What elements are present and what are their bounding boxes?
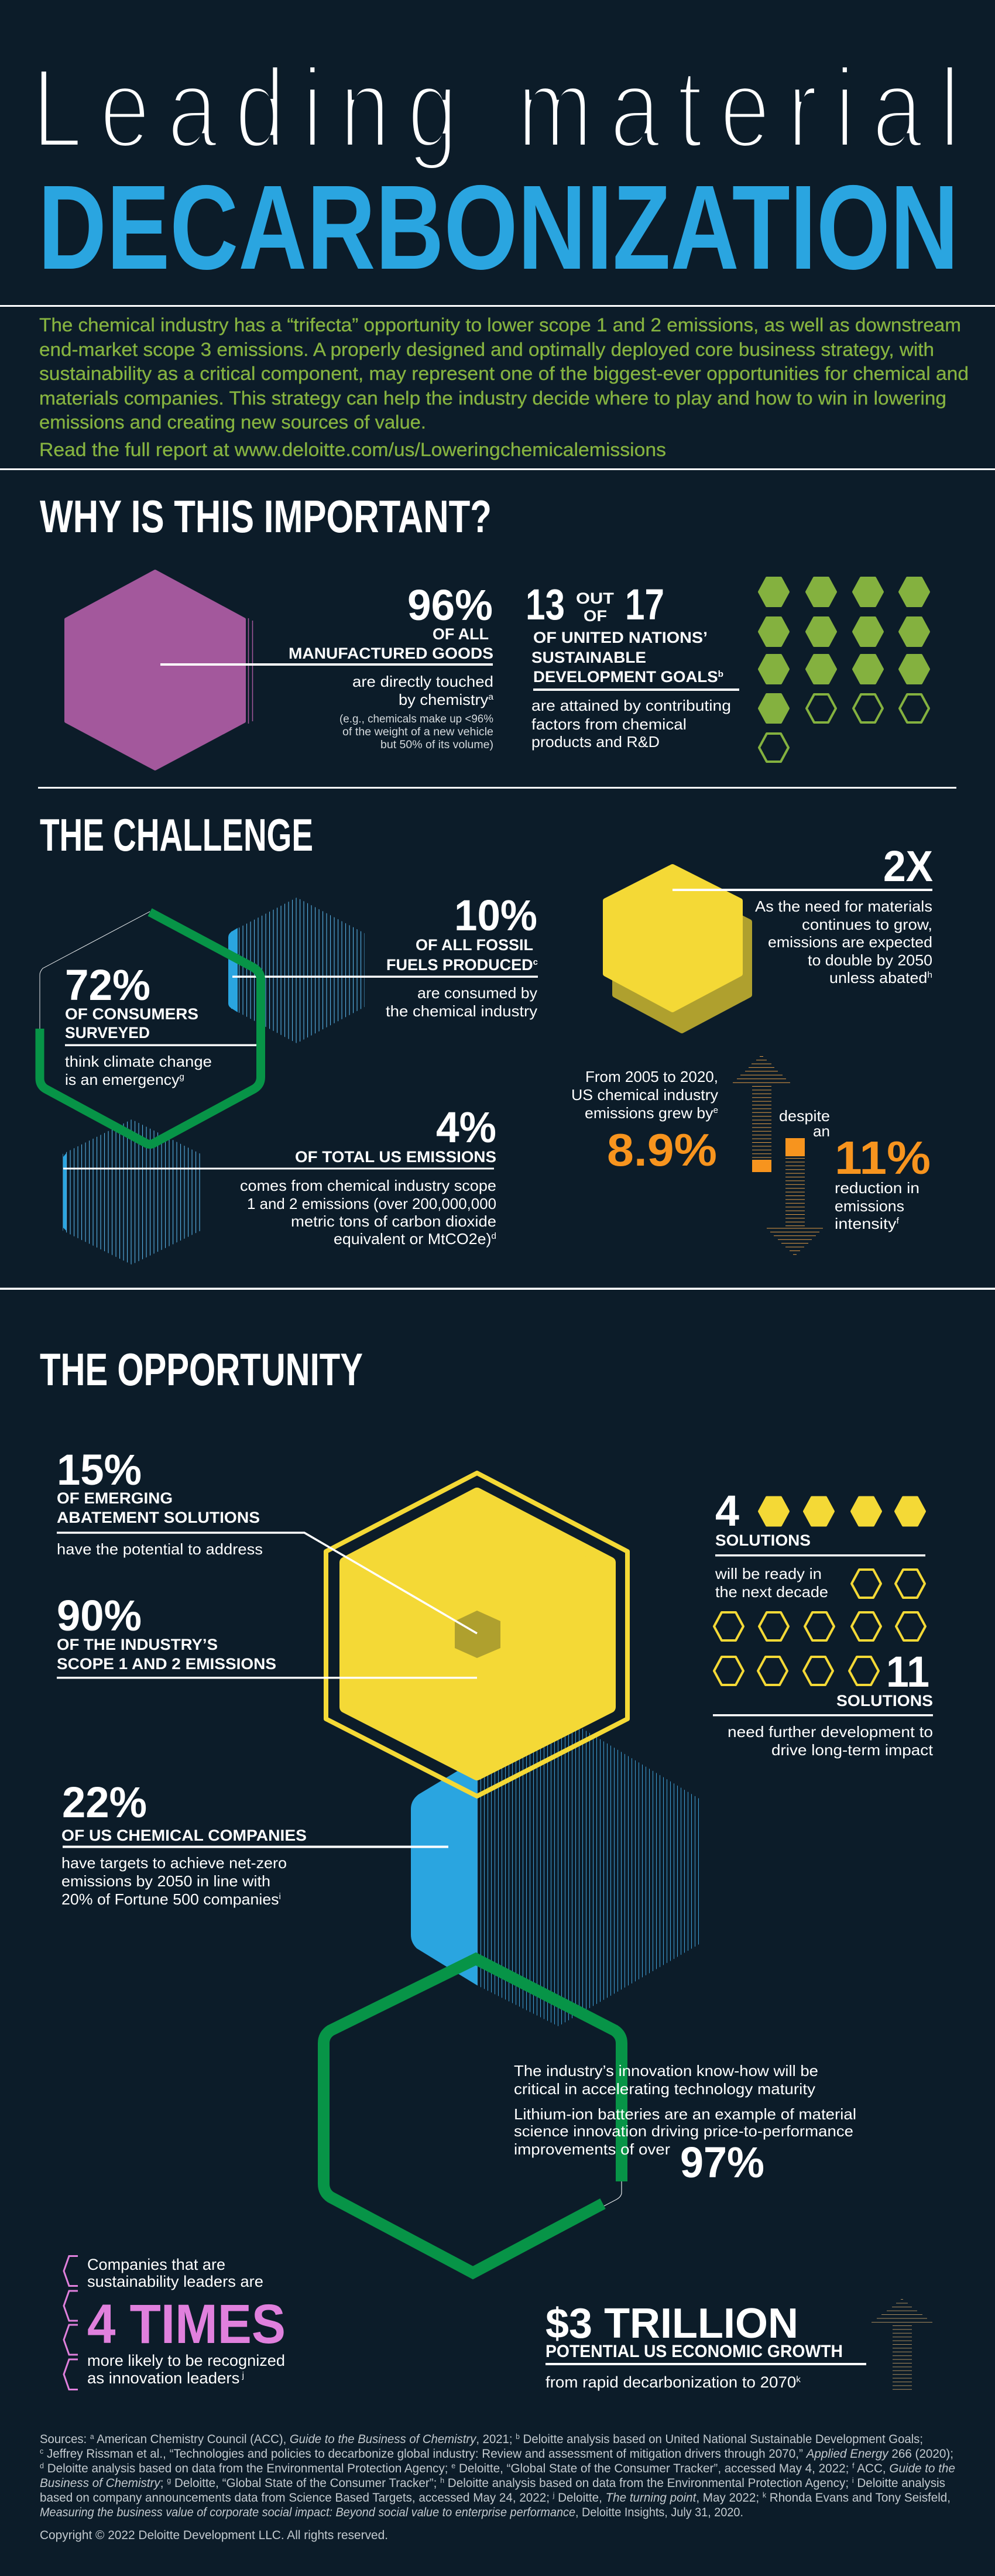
stat: 11% reduction: emissions	[835, 1197, 904, 1215]
stat: 90%: 90%	[57, 1591, 142, 1640]
stat: 4%: 1 and 2 emissions (over 200,000,000	[247, 1195, 496, 1212]
stat: 72%	[65, 961, 256, 1088]
sources: American Chemistry Council (ACC),	[94, 2432, 290, 2446]
stat: 2X: unless abated	[829, 969, 924, 986]
intro paragraph: materials companies. This strategy can help the industry decide where to play and how to win in lowering	[39, 388, 946, 409]
stat: 11 solutions: 11	[886, 1647, 929, 1696]
stat: 4%: d	[491, 1231, 496, 1241]
stat: 4%: equivalent or MtCO2e)	[334, 1230, 487, 1248]
stat: 13 out of 17: products and R&D	[531, 733, 660, 751]
sources: i	[852, 2476, 854, 2485]
stat: 11 solutions: need further development to	[728, 1723, 933, 1741]
stat: 15%: OF EMERGING	[57, 1489, 173, 1507]
sources: Business of Chemistry;	[40, 2476, 165, 2490]
stat: 15%	[57, 1445, 477, 1633]
stat: 96%: are directly touched	[352, 673, 493, 690]
stat: 13 out of 17: are attained by contributing	[531, 697, 731, 714]
sources: Rhonda Evans and Tony Seisfeld,	[766, 2491, 951, 2505]
intro paragraph: The chemical industry has a “trifecta” opportunity to lower scope 1 and 2 emissions, as well as downstream	[39, 314, 961, 335]
stat: 15%: ABATEMENT SOLUTIONS	[57, 1509, 260, 1526]
sources: h	[440, 2476, 444, 2485]
stat: 90%	[57, 1591, 477, 1679]
stat: 22%	[61, 1778, 448, 1908]
stat: 10%: the chemical industry	[386, 1002, 537, 1020]
icon: striped hexagon 10%	[228, 898, 365, 1043]
stat: 96%: a	[488, 692, 494, 702]
stat: 72%: OF CONSUMERS	[65, 1005, 198, 1023]
sources: Deloitte analysis	[854, 2476, 945, 2490]
stat: 13 out of 17: b	[718, 669, 723, 679]
stat: 11% reduction: 11%	[835, 1132, 931, 1184]
stat: 72%: is an emergency	[65, 1071, 177, 1088]
stat: 4 solutions	[715, 1486, 925, 1601]
text: innovation and 97%: critical in accelerating technology maturity	[514, 2080, 815, 2098]
sources: k	[763, 2491, 767, 2499]
stat: $3 trillion: k	[796, 2375, 801, 2385]
stat: 8.9% growth	[571, 1068, 718, 1176]
stat: 11% reduction: intensity	[835, 1215, 890, 1232]
stat: 96%: by chemistry	[399, 691, 484, 708]
sources: d	[40, 2461, 44, 2470]
stat: 11 solutions: SOLUTIONS	[836, 1692, 933, 1710]
stat: 4%: OF TOTAL US EMISSIONS	[295, 1148, 496, 1166]
icon: striped hexagon 4%	[63, 1119, 201, 1265]
sources: Deloitte, “Global State of the Consumer Tracker”, accessed May 4, 2022;	[455, 2461, 852, 2475]
sources: f	[852, 2461, 855, 2470]
icon: pink hexagon brackets	[64, 2256, 78, 2390]
sources: Deloitte,	[554, 2491, 606, 2505]
title line: Leading material: Leading material	[32, 46, 960, 172]
stat: 13 out of 17: OF UNITED NATIONS’	[533, 629, 708, 646]
stat: 2X: 2X	[883, 842, 933, 890]
arrow: up	[733, 1056, 790, 1172]
stat: $3 trillion: $3 TRILLION	[545, 2300, 798, 2347]
icon: large green open hexagon	[324, 1959, 622, 2273]
stat: 10%: are consumed by	[417, 984, 537, 1002]
stat: 4%: metric tons of carbon dioxide	[291, 1212, 496, 1230]
stat: 10%: OF ALL FOSSIL	[416, 936, 533, 954]
stat: 72%: SURVEYED	[65, 1024, 150, 1042]
stat: 72%: 72%	[65, 961, 150, 1009]
stat: 2X: h	[927, 970, 932, 980]
stat: 22%: i	[279, 1892, 281, 1902]
title	[32, 46, 960, 294]
stat: 10%: c	[533, 957, 538, 967]
stat: 22%: OF US CHEMICAL COMPANIES	[61, 1827, 307, 1844]
stat: 4 times: more likely to be recognized	[87, 2352, 285, 2369]
stat: 13 out of 17: 17	[625, 580, 664, 629]
sources: a	[90, 2432, 94, 2441]
stat: 72%: think climate change	[65, 1053, 212, 1070]
sources: c	[40, 2447, 44, 2455]
stat: 2X: emissions are expected	[768, 933, 932, 951]
stat: 96%: 96%	[407, 581, 493, 629]
heading: why is this important: WHY IS THIS IMPORTANT?	[40, 491, 492, 542]
sources: Deloitte, “Global State of the Consumer Tracker”;	[171, 2476, 440, 2490]
stat: 4%: comes from chemical industry scope	[240, 1177, 496, 1194]
stat: 13 out of 17: 13	[526, 580, 565, 629]
stat: 4 solutions: 4	[715, 1486, 739, 1535]
stat: 2X: to double by 2050	[808, 951, 932, 969]
sources: Deloitte analysis based on United National Sustainable Development Goals;	[520, 2432, 923, 2446]
sources: ACC,	[855, 2461, 889, 2475]
stat: 72%: g	[179, 1072, 184, 1082]
stat: 13 out of 17: factors from chemical	[531, 715, 687, 733]
stat: 11 solutions: drive long-term impact	[771, 1741, 934, 1759]
stat: 22%: have targets to achieve net-zero	[61, 1854, 287, 1872]
sources: based on company announcements data from Science Based Targets, accessed May 24, 2022;	[40, 2491, 571, 2505]
stat: 10%: FUELS PRODUCED	[386, 956, 533, 974]
stat: 2X: continues to grow,	[802, 916, 932, 933]
sources: Guide to the Business of Chemistry, 2021;	[290, 2432, 514, 2446]
stat: 11% reduction	[779, 1107, 931, 1232]
stat: $3 trillion: POTENTIAL US ECONOMIC GROWTH	[545, 2342, 843, 2361]
sources: Applied Energy 266 (2020);	[807, 2447, 956, 2461]
sources: b	[516, 2432, 520, 2441]
intro paragraph: emissions and creating new sources of value.	[39, 412, 426, 433]
stat: 13 out of 17	[526, 580, 739, 751]
arrow: down	[767, 1138, 823, 1255]
stat: 96%	[160, 581, 494, 751]
sources: j	[553, 2491, 555, 2499]
stat: 22%: 20% of Fortune 500 companies	[61, 1890, 273, 1908]
text: innovation and 97%: improvements of over	[514, 2140, 670, 2158]
stat: 8.9% growth: 8.9%	[607, 1124, 717, 1176]
heading: the opportunity: THE OPPORTUNITY	[40, 1344, 363, 1395]
stat: 8.9% growth: emissions grew by	[585, 1104, 710, 1122]
stat: 15%: 15%	[57, 1445, 142, 1494]
stat: 11% reduction: reduction in	[835, 1179, 919, 1197]
stat: 13 out of 17: DEVELOPMENT GOALS	[533, 668, 714, 686]
stat: 8.9% growth: e	[713, 1105, 718, 1115]
stat: 10%: 10%	[454, 891, 537, 940]
text: innovation and 97%: Lithium-ion batteries are an example of material	[514, 2105, 856, 2123]
text: innovation and 97%: 97%	[680, 2138, 764, 2187]
stat: 4 times: 4 TIMES	[87, 2293, 286, 2355]
icon: large yellow hexagon	[326, 1473, 627, 1796]
stat: 11 solutions	[713, 1647, 934, 1759]
stat: 13 out of 17: OUT	[576, 590, 615, 607]
stat: $3 trillion	[545, 2300, 866, 2391]
intro paragraph: sustainability as a critical component, may represent one of the biggest-ever opportunities for chemical and	[39, 363, 969, 384]
stat: 96%: OF ALL	[433, 625, 489, 643]
sources: Jeffrey Rissman et al., “Technologies and policies to decarbonize global industry: Review and assessment of mitigation drivers through 2070,”	[43, 2447, 807, 2461]
stat: 4%	[63, 1103, 496, 1248]
stat: 96%: of the weight of a new vehicle	[342, 726, 493, 738]
intro paragraph: end-market scope 3 emissions. A properly designed and optimally deployed core business strategy, with	[39, 339, 934, 360]
stat: 4 times: j	[239, 2371, 244, 2380]
stat: $3 trillion: from rapid decarbonization to 2070	[545, 2373, 790, 2391]
stat: 8.9% growth: US chemical industry	[571, 1086, 718, 1104]
sources: g	[167, 2476, 171, 2485]
sources: Measuring the business value of corporate social impact: Beyond social value to enterprise performance, Deloitte Insights, July 31, 2020.	[40, 2505, 743, 2519]
stat: 96%: but 50% of its volume)	[380, 739, 493, 751]
stat: 4%: 4%	[436, 1103, 496, 1152]
stat: 22%: 22%	[62, 1778, 147, 1827]
stat: 96%: (e.g., chemicals make up <96%	[339, 713, 493, 725]
sources	[40, 2432, 955, 2519]
stat: 4 times: sustainability leaders are	[87, 2273, 263, 2290]
sources: Sources:	[40, 2432, 90, 2446]
text: innovation and 97%: science innovation driving price-to-performance	[514, 2122, 853, 2140]
sources: The turning point, May 2022;	[606, 2491, 762, 2505]
stat: 10%	[232, 891, 538, 1020]
intro paragraph	[39, 314, 969, 460]
stat: 90%: SCOPE 1 AND 2 EMISSIONS	[57, 1655, 276, 1673]
stat: 90%: OF THE INDUSTRY’S	[57, 1636, 218, 1653]
sources: Deloitte analysis based on data from the Environmental Protection Agency;	[44, 2461, 451, 2475]
stat: 11% reduction: an	[813, 1122, 830, 1140]
stat: 4 solutions: will be ready in	[715, 1565, 822, 1582]
icon grid: solution hexagons	[714, 1498, 925, 1685]
icon: yellow hexagons 2X	[606, 867, 749, 1030]
icon: green open hexagon 72%	[40, 912, 261, 1144]
sources: Guide to the	[889, 2461, 955, 2475]
stat: 96%: MANUFACTURED GOODS	[289, 645, 493, 662]
copyright: Copyright © 2022 Deloitte Development LLC. All rights reserved.	[40, 2528, 388, 2542]
stat: 22%: emissions by 2050 in line with	[61, 1872, 270, 1890]
text: innovation and 97%: The industry’s innovation know-how will be	[514, 2062, 818, 2080]
stat: 4 times	[87, 2256, 286, 2387]
heading: the challenge: THE CHALLENGE	[40, 809, 313, 861]
stat: 2X: As the need for materials	[755, 898, 932, 915]
stat: 8.9% growth: From 2005 to 2020,	[585, 1068, 718, 1085]
stat: 11% reduction: f	[896, 1216, 900, 1226]
stat: 4 solutions: SOLUTIONS	[715, 1532, 811, 1549]
text: innovation and 97%	[514, 2062, 856, 2187]
stat: 4 times: as innovation leaders	[87, 2369, 236, 2387]
icon grid: 13 of 17 hexagons	[759, 578, 929, 762]
stat: 15%: have the potential to address	[57, 1540, 263, 1558]
stat: 4 times: Companies that are	[87, 2256, 225, 2273]
sources: e	[451, 2461, 455, 2470]
arrow: economic growth	[872, 2300, 932, 2389]
stat: 2X	[673, 842, 933, 986]
stat: 13 out of 17: OF	[584, 607, 607, 625]
stat: 13 out of 17: SUSTAINABLE	[531, 649, 646, 666]
stat: 4 solutions: the next decade	[715, 1583, 828, 1601]
icon: striped blue hexagon 22%	[411, 1712, 700, 2026]
stat: 11% reduction: despite	[779, 1107, 830, 1125]
sources: Deloitte analysis based on data from the Environmental Protection Agency;	[444, 2476, 852, 2490]
intro paragraph: Read the full report at www.deloitte.com/us/Loweringchemicalemissions	[39, 439, 666, 460]
icon: purple hexagon	[66, 571, 253, 769]
